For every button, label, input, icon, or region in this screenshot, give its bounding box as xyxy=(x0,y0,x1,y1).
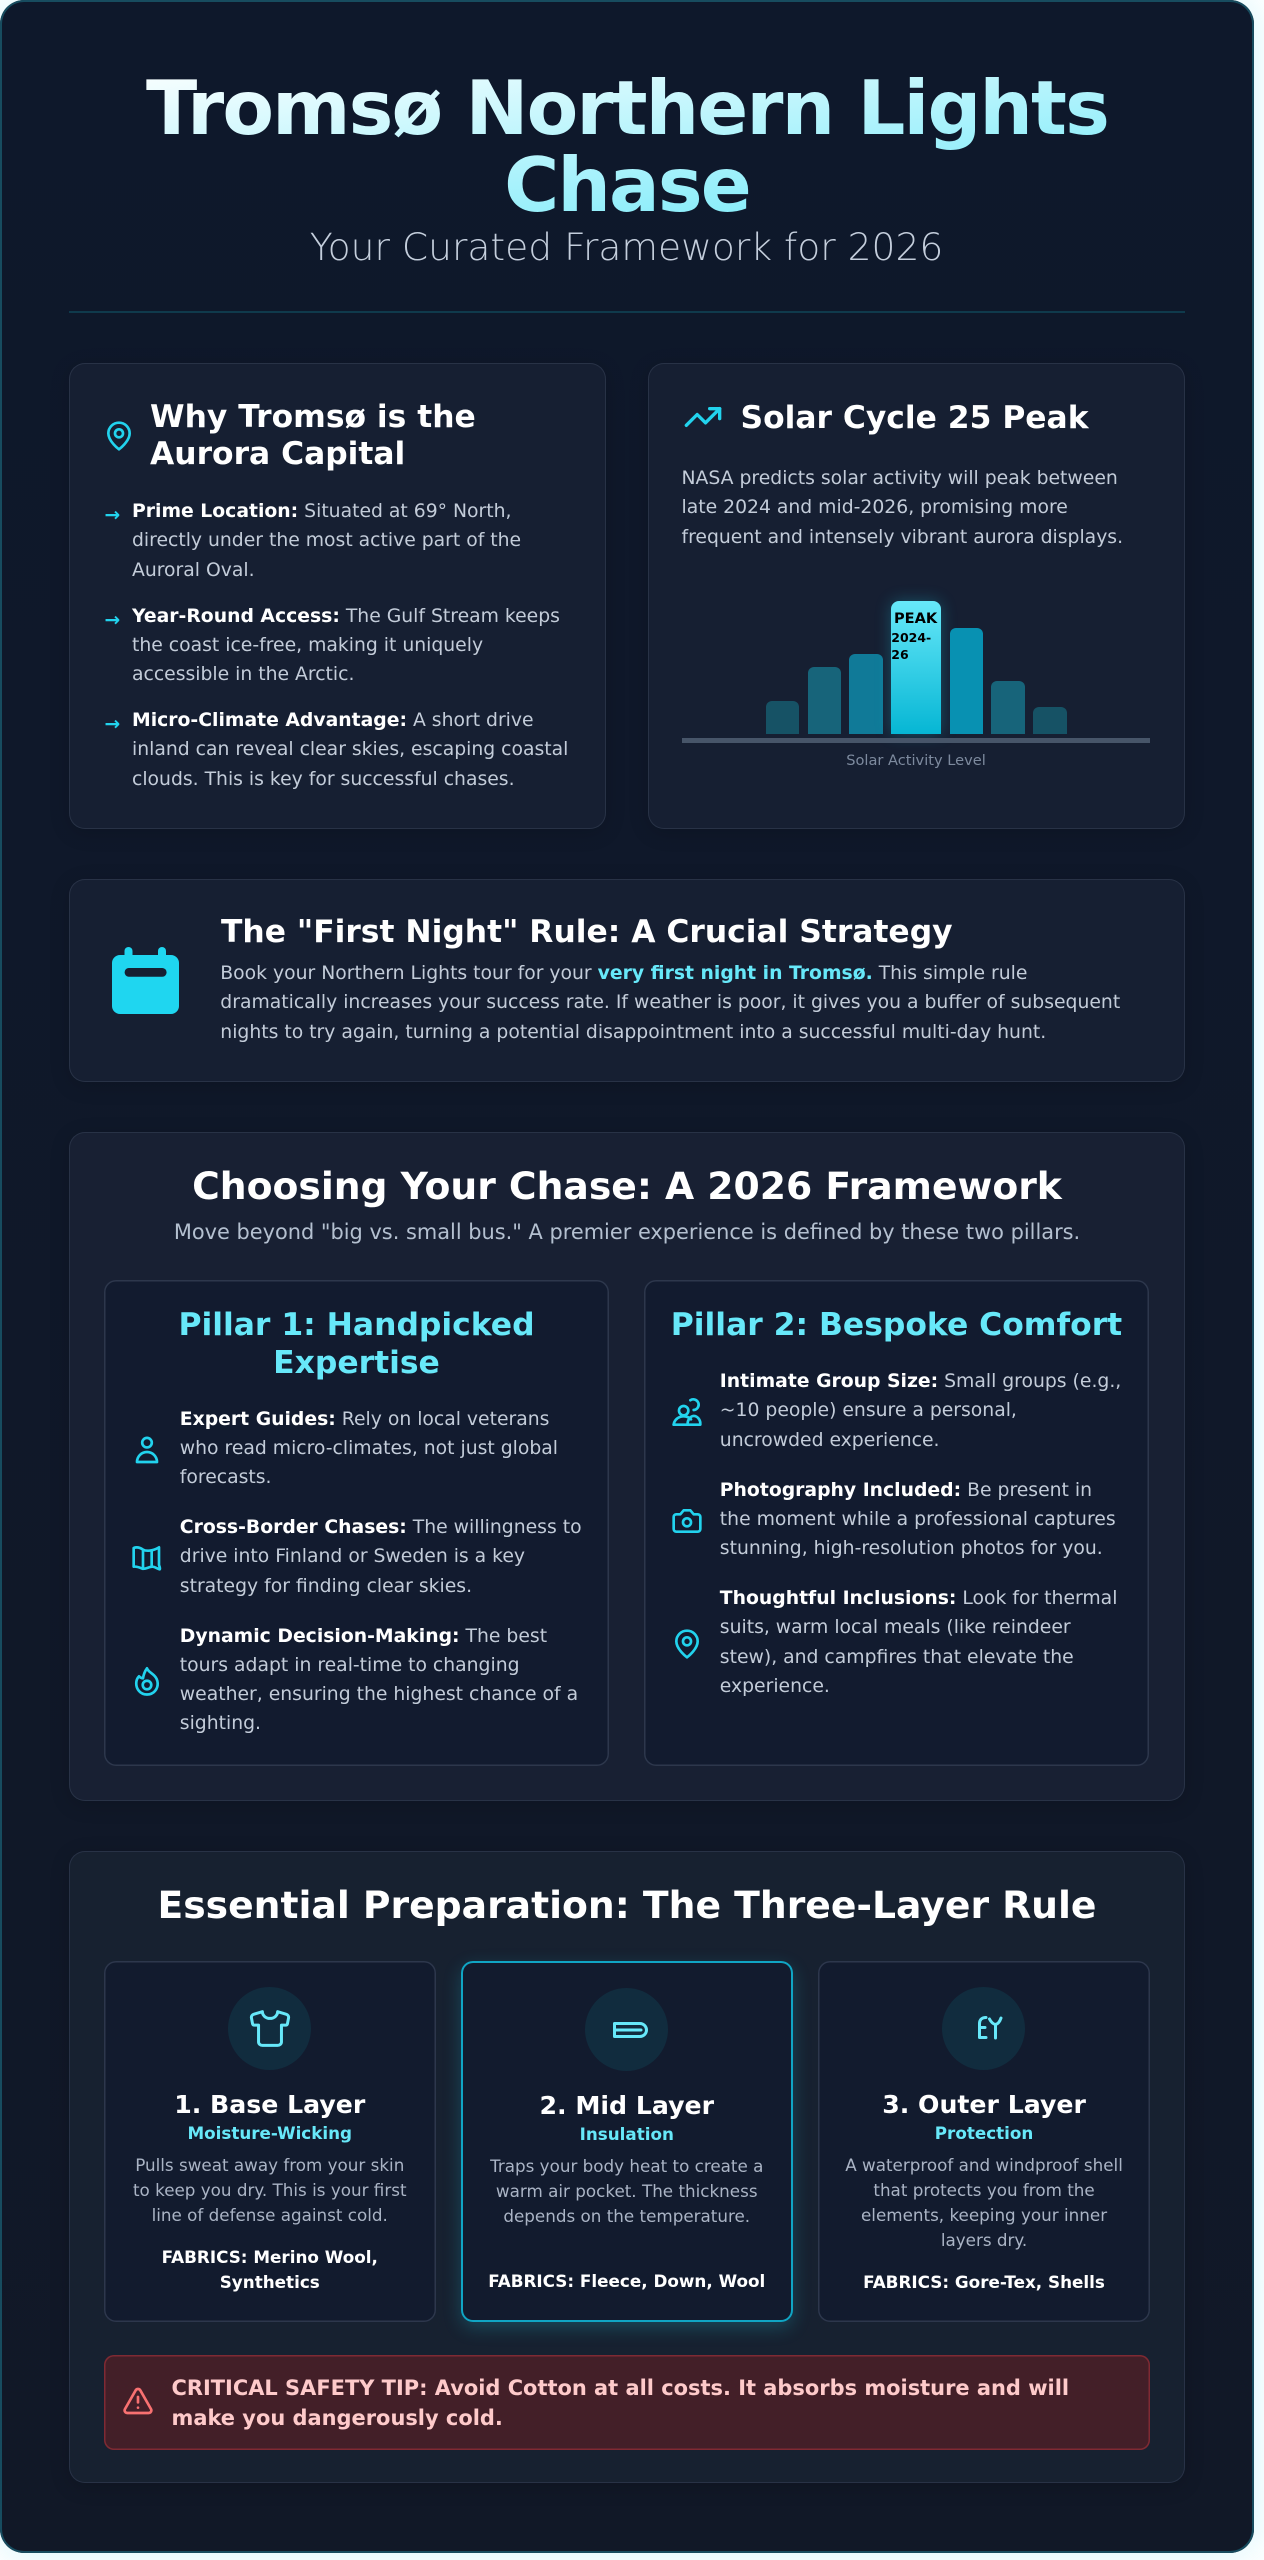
item: expert guides xyxy=(136,1409,558,1488)
list item: year-round access: → xyxy=(104,610,120,631)
fabrics: Synthetics xyxy=(220,2272,320,2292)
description: dramatically increases your success rate. If weather is poor, it gives you a buffer of subsequent xyxy=(220,992,1120,1013)
heading: Choosing Your Chase: A 2026 Framework xyxy=(192,1164,1062,1208)
list item: micro-climate: inland can reveal clear skies, escaping coastal xyxy=(132,739,568,760)
subheading: Move beyond "big vs. small bus." A premier experience is defined by these two pillars. xyxy=(174,1220,1080,1244)
layer title: 2. Mid Layer xyxy=(539,2090,714,2120)
layer description: that protects you from the xyxy=(873,2180,1095,2200)
item: dynamic decision-making: Dynamic Decision-Making: The best xyxy=(180,1626,547,1647)
heading: Aurora Capital xyxy=(150,436,405,472)
description: NASA predicts solar activity will peak between xyxy=(682,468,1118,489)
panel: pillar 1 xyxy=(104,1280,609,1766)
tip text: make you dangerously cold. xyxy=(172,2406,503,2430)
list item: micro-climate: Micro-Climate Advantage: A short drive xyxy=(132,710,534,731)
heading: Solar Cycle 25 Peak xyxy=(740,400,1089,436)
heading: The "First Night" Rule: A Crucial Strategy xyxy=(221,914,953,950)
layer description: depends on the temperature. xyxy=(503,2206,750,2226)
peak bar: PEAK xyxy=(894,610,937,627)
axis label: Solar Activity Level xyxy=(846,752,986,769)
layer description: Traps your body heat to create a xyxy=(490,2156,763,2176)
description xyxy=(682,468,1123,548)
list item: year-round access xyxy=(104,606,560,685)
item: thoughtful inclusions xyxy=(675,1588,1117,1697)
item: photography included: stunning, high-resolution photos for you. xyxy=(720,1538,1103,1559)
tip text xyxy=(172,2376,1069,2430)
panel: first night rule xyxy=(69,879,1185,1082)
item: cross-border chases: strategy for finding clear skies. xyxy=(180,1576,472,1597)
peak bar: 26 xyxy=(891,647,909,662)
list item: year-round access: accessible in the Arctic. xyxy=(132,664,354,685)
layer description xyxy=(133,2155,407,2225)
item: thoughtful inclusions: Thoughtful Inclusions: Look for thermal xyxy=(720,1588,1117,1609)
item: expert guides: forecasts. xyxy=(180,1467,272,1488)
heading xyxy=(150,398,476,472)
item: dynamic decision-making: sighting. xyxy=(180,1713,261,1734)
item: expert guides: who read micro-climates, not just global xyxy=(180,1438,558,1459)
icon: insulation xyxy=(585,1988,668,2071)
list item: year-round access: the coast ice-free, making it uniquely xyxy=(132,635,483,656)
heading: Why Tromsø is the xyxy=(150,398,476,434)
icon: shirt xyxy=(228,1987,311,2070)
header xyxy=(146,64,1108,269)
icon: calendar xyxy=(112,947,179,1014)
layer description xyxy=(845,2155,1123,2250)
item: intimate group size: ~10 people) ensure a personal, xyxy=(720,1400,1017,1421)
item: intimate group size xyxy=(672,1371,1121,1451)
fabrics: FABRICS: Gore-Tex, Shells xyxy=(863,2272,1105,2292)
list item: micro-climate: → xyxy=(104,714,120,735)
item: thoughtful inclusions: experience. xyxy=(720,1676,830,1697)
item: photography included: the moment while a professional captures xyxy=(720,1509,1116,1530)
tip text: CRITICAL SAFETY TIP: Avoid Cotton at all costs. It absorbs moisture and will xyxy=(172,2376,1069,2400)
title: Chase xyxy=(504,140,750,228)
layer description: line of defense against cold. xyxy=(152,2205,388,2225)
panel: solar cycle xyxy=(648,363,1185,829)
heading: Essential Preparation: The Three-Layer Rule xyxy=(157,1883,1096,1927)
fabrics: FABRICS: Fleece, Down, Wool xyxy=(488,2271,765,2291)
item: dynamic decision-making: weather, ensuring the highest chance of a xyxy=(180,1684,578,1705)
list item: micro-climate xyxy=(104,710,568,790)
title xyxy=(69,70,1185,223)
pillar heading xyxy=(178,1306,535,1380)
item: expert guides: Expert Guides: Rely on local veterans xyxy=(180,1409,549,1430)
panel: choosing your chase xyxy=(69,1132,1185,1801)
description: frequent and intensely vibrant aurora displays. xyxy=(682,527,1123,548)
layer title: 1. Base Layer xyxy=(174,2090,365,2118)
layer description: to keep you dry. This is your first xyxy=(133,2180,407,2200)
layer description: elements, keeping your inner xyxy=(861,2205,1107,2225)
layer title: 3. Outer Layer xyxy=(882,2090,1086,2118)
pillar heading: Expertise xyxy=(273,1344,440,1380)
list item: year-round access: Year-Round Access: The Gulf Stream keeps xyxy=(132,606,560,627)
pillar heading: Pillar 2: Bespoke Comfort xyxy=(671,1306,1122,1342)
title: Tromsø Northern Lights xyxy=(146,64,1108,152)
peak bar xyxy=(891,601,941,734)
fabrics: FABRICS: Merino Wool, xyxy=(162,2247,378,2267)
list item: prime location xyxy=(104,501,521,581)
description xyxy=(220,963,1120,1043)
panel: why Tromsø xyxy=(69,363,606,829)
subtitle: Your Curated Framework for 2026 xyxy=(310,225,943,269)
panel: essential preparation xyxy=(69,1851,1185,2483)
item: photography included xyxy=(672,1480,1116,1559)
item: dynamic decision-making: tours adapt in real-time to changing xyxy=(180,1655,520,1676)
layer type: Moisture-Wicking xyxy=(187,2123,352,2143)
list item: micro-climate: clouds. This is key for successful chases. xyxy=(132,769,515,790)
peak bar: 2024- xyxy=(891,630,931,645)
item: intimate group size: uncrowded experience. xyxy=(720,1430,940,1451)
icon: map pin xyxy=(107,421,131,451)
description: late 2024 and mid-2026, promising more xyxy=(682,497,1068,518)
description: Book your Northern Lights tour for your very first night in Tromsø. This simple rule xyxy=(220,963,1027,984)
item: dynamic decision-making xyxy=(134,1626,578,1734)
item: cross-border chases xyxy=(132,1517,582,1597)
callout: critical safety tip xyxy=(104,2355,1150,2450)
pillar heading: Pillar 1: Handpicked xyxy=(178,1306,535,1342)
item: thoughtful inclusions: stew), and campfires that elevate the xyxy=(720,1647,1074,1668)
card: base layer xyxy=(104,1961,436,2322)
layer type: Insulation xyxy=(580,2124,674,2144)
item: cross-border chases: Cross-Border Chases: The willingness to xyxy=(180,1517,582,1538)
list item: prime location: → xyxy=(104,505,120,526)
layer description xyxy=(490,2156,763,2226)
item: thoughtful inclusions: suits, warm local meals (like reindeer xyxy=(720,1617,1071,1638)
card: mid layer xyxy=(461,1961,792,2322)
bar chart: solar activity xyxy=(682,594,1150,769)
item: photography included: Photography Included: Be present in xyxy=(720,1480,1092,1501)
item: intimate group size: Intimate Group Size: Small groups (e.g., xyxy=(720,1371,1121,1392)
card: outer layer xyxy=(818,1961,1150,2322)
list item: prime location: directly under the most active part of the xyxy=(132,530,521,551)
icon: warning triangle xyxy=(123,2388,153,2414)
icon: protection xyxy=(942,1987,1025,2070)
icon: trending up xyxy=(684,406,722,428)
description: nights to try again, turning a potential disappointment into a successful multi-day hunt. xyxy=(220,1022,1046,1043)
layer description: warm air pocket. The thickness xyxy=(496,2181,758,2201)
layer type: Protection xyxy=(935,2123,1033,2143)
item: cross-border chases: drive into Finland or Sweden is a key xyxy=(180,1546,525,1567)
layer description: Pulls sweat away from your skin xyxy=(135,2155,404,2175)
panel: pillar 2 xyxy=(644,1280,1149,1766)
fabrics xyxy=(162,2247,378,2292)
list item: prime location: Auroral Oval. xyxy=(132,560,255,581)
layer description: layers dry. xyxy=(941,2230,1027,2250)
layer description: A waterproof and windproof shell xyxy=(845,2155,1123,2175)
list item: prime location: Prime Location: Situated at 69° North, xyxy=(132,501,512,522)
